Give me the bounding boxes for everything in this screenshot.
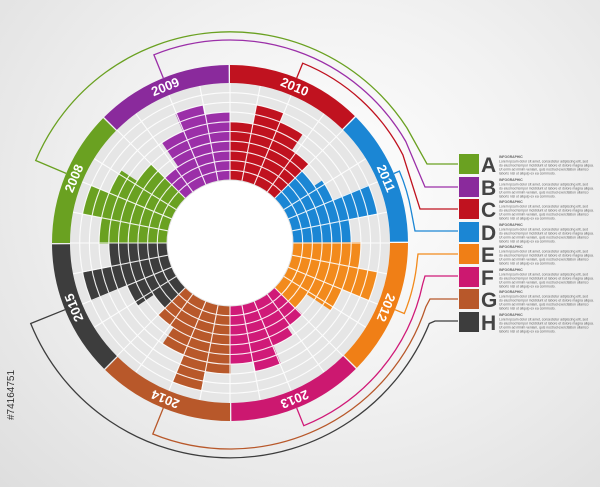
legend: Ut enim ad minim veniam, quis nostrud exercitation ullamco	[499, 236, 589, 240]
bars	[91, 104, 369, 382]
legend: INFOGRAPHIC	[499, 268, 523, 272]
legend: Lorem ipsum dolor sit amet, consectetur adipiscing elit, sed	[499, 272, 588, 276]
legend: laboris nisi ut aliquip ex ea commodo.	[499, 306, 556, 310]
legend: C	[481, 199, 496, 222]
legend: G	[481, 289, 497, 312]
year labels: 2013	[278, 387, 311, 412]
year labels: 2011	[374, 162, 398, 194]
legend: INFOGRAPHIC	[499, 200, 523, 204]
legend: A	[481, 154, 496, 177]
legend: laboris nisi ut aliquip ex ea commodo.	[499, 330, 556, 334]
legend: Lorem ipsum dolor sit amet, consectetur adipiscing elit, sed	[499, 318, 588, 322]
legend: do eiusmod tempor incididunt ut labore et dolore magna aliqua.	[499, 208, 594, 212]
legend: laboris nisi ut aliquip ex ea commodo.	[499, 240, 556, 244]
year labels: 2010	[278, 74, 311, 99]
legend: do eiusmod tempor incididunt ut labore et dolore magna aliqua.	[499, 186, 594, 190]
legend: Ut enim ad minim veniam, quis nostrud exercitation ullamco	[499, 326, 589, 330]
stock id text: #74164751	[6, 370, 17, 420]
year labels: 2009	[149, 74, 182, 99]
legend: Ut enim ad minim veniam, quis nostrud exercitation ullamco	[499, 190, 589, 194]
connector lines	[31, 32, 458, 458]
legend: laboris nisi ut aliquip ex ea commodo.	[499, 194, 556, 198]
legend: Lorem ipsum dolor sit amet, consectetur adipiscing elit, sed	[499, 182, 588, 186]
legend: laboris nisi ut aliquip ex ea commodo.	[499, 172, 556, 176]
legend: H	[481, 312, 496, 335]
legend: do eiusmod tempor incididunt ut labore et dolore magna aliqua.	[499, 232, 594, 236]
legend: Lorem ipsum dolor sit amet, consectetur adipiscing elit, sed	[499, 250, 588, 254]
year labels: 2015	[61, 291, 86, 324]
legend: INFOGRAPHIC	[499, 155, 523, 159]
legend: INFOGRAPHIC	[499, 178, 523, 182]
legend: Lorem ipsum dolor sit amet, consectetur adipiscing elit, sed	[499, 228, 588, 232]
legend: do eiusmod tempor incididunt ut labore et dolore magna aliqua.	[499, 276, 594, 280]
year labels: 2008	[61, 162, 86, 195]
year labels: 2012	[374, 291, 399, 324]
legend: Ut enim ad minim veniam, quis nostrud exercitation ullamco	[499, 280, 589, 284]
legend: Ut enim ad minim veniam, quis nostrud exercitation ullamco	[499, 212, 589, 216]
legend: E	[481, 244, 495, 267]
legend: laboris nisi ut aliquip ex ea commodo.	[499, 284, 556, 288]
inner white circle	[167, 180, 293, 306]
legend: do eiusmod tempor incididunt ut labore et dolore magna aliqua.	[499, 254, 594, 258]
legend: INFOGRAPHIC	[499, 290, 523, 294]
legend: D	[481, 222, 496, 245]
legend: Lorem ipsum dolor sit amet, consectetur adipiscing elit, sed	[499, 160, 588, 164]
legend: Ut enim ad minim veniam, quis nostrud exercitation ullamco	[499, 168, 589, 172]
legend: INFOGRAPHIC	[499, 313, 523, 317]
legend: do eiusmod tempor incididunt ut labore et dolore magna aliqua.	[499, 164, 594, 168]
legend: Lorem ipsum dolor sit amet, consectetur adipiscing elit, sed	[499, 294, 588, 298]
legend: do eiusmod tempor incididunt ut labore et dolore magna aliqua.	[499, 322, 594, 326]
legend: Ut enim ad minim veniam, quis nostrud exercitation ullamco	[499, 258, 589, 262]
legend: INFOGRAPHIC	[499, 245, 523, 249]
legend: B	[481, 177, 496, 200]
outer year ring	[0, 4, 469, 482]
legend: Lorem ipsum dolor sit amet, consectetur adipiscing elit, sed	[499, 204, 588, 208]
legend: laboris nisi ut aliquip ex ea commodo.	[499, 216, 556, 220]
legend: INFOGRAPHIC	[499, 223, 523, 227]
legend: Ut enim ad minim veniam, quis nostrud exercitation ullamco	[499, 302, 589, 306]
year labels	[61, 74, 399, 412]
legend: F	[481, 267, 494, 290]
legend	[459, 154, 594, 335]
legend: do eiusmod tempor incididunt ut labore et dolore magna aliqua.	[499, 298, 594, 302]
year labels: 2014	[148, 387, 182, 412]
legend: laboris nisi ut aliquip ex ea commodo.	[499, 262, 556, 266]
chart: radial bar chart	[70, 83, 390, 403]
